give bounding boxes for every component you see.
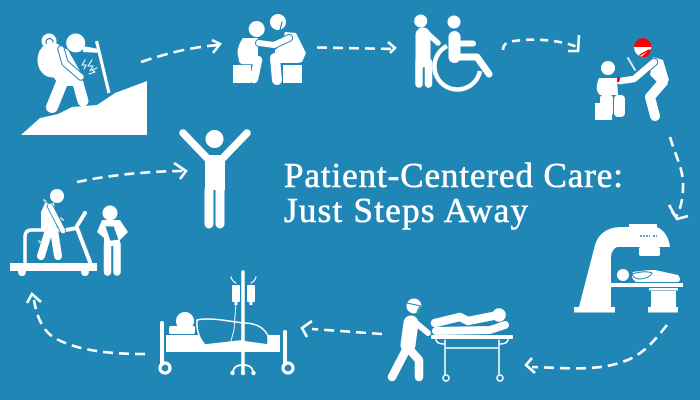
- icon: attendant and wheelchair patient: [414, 14, 489, 89]
- icon: doctor examining patient with stethoscope: [233, 14, 306, 83]
- icon: hiker with knee pain on mountain: [21, 34, 147, 135]
- icon: nurse drawing blood from seated patient: [595, 38, 669, 120]
- arrow: radiotherapy to stretcher: [526, 325, 667, 373]
- arrow: hospital bed to treadmill: [27, 294, 145, 354]
- icon: nurse pushing patient on stretcher: [392, 298, 513, 381]
- icon: patient on treadmill with therapist: [10, 189, 128, 276]
- arrow: doctor to wheelchair: [317, 42, 395, 53]
- icon: recovered person with raised arms: [183, 130, 247, 224]
- nurse head with red cap and mask: [634, 38, 652, 57]
- icon: patient in hospital bed with IV stand: [160, 272, 293, 375]
- icon: radiotherapy machine with patient: [574, 224, 683, 312]
- arrow: treadmill to recovered person: [77, 163, 186, 182]
- arrow: wheelchair to blood draw: [503, 35, 579, 51]
- title: Patient-Centered Care:: [284, 156, 623, 195]
- arrow: blood draw to radiotherapy: [669, 137, 688, 219]
- arrow: hiker to doctor: [141, 40, 220, 62]
- title: Just Steps Away: [284, 191, 528, 230]
- arrow: stretcher to hospital bed: [302, 321, 382, 337]
- title: [284, 156, 623, 230]
